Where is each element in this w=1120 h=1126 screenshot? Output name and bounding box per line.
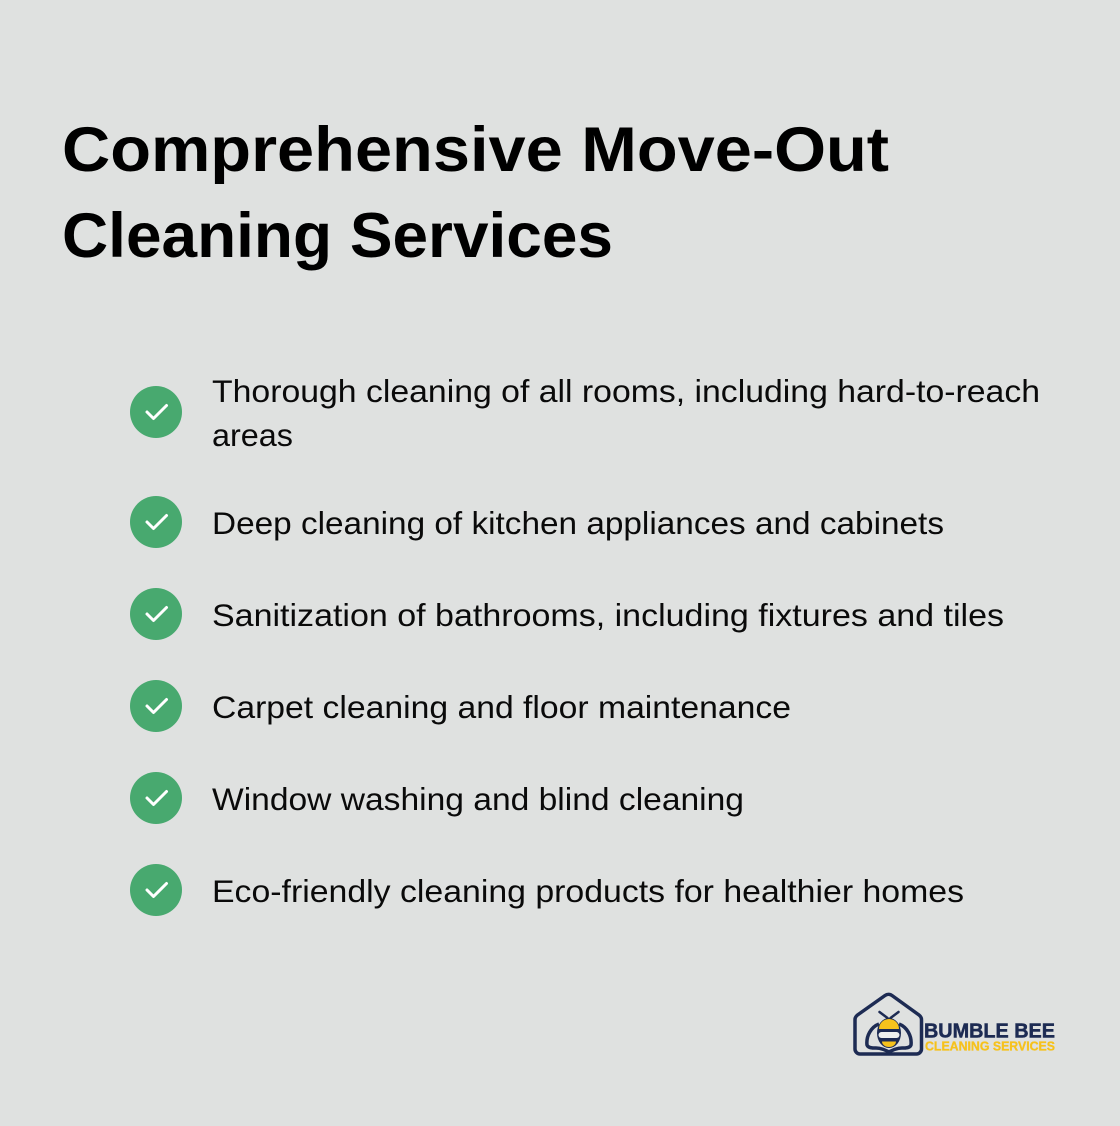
list item: sanitization: Sanitization of bathrooms, including fixtures and tiles (212, 597, 1004, 633)
list item: thorough cleaning (130, 373, 1040, 453)
list item: deep cleaning (130, 496, 944, 548)
icon: house with bee (855, 994, 922, 1054)
list item: deep cleaning: Deep cleaning of kitchen appliances and cabinets (212, 505, 944, 541)
logo wordmark: CLEANING SERVICES (925, 1040, 1055, 1054)
list item: eco-friendly products (130, 864, 964, 916)
list item: thorough cleaning: Thorough cleaning of all rooms, including hard-to-reach (212, 373, 1040, 409)
title (62, 115, 889, 271)
list item: carpet cleaning (130, 680, 791, 732)
list item: window washing: Window washing and blind cleaning (212, 781, 744, 817)
list item: carpet cleaning: Carpet cleaning and floor maintenance (212, 689, 791, 725)
list item: thorough cleaning: areas (212, 417, 293, 453)
logo wordmark (924, 1020, 1055, 1054)
list item: eco-friendly products: Eco-friendly cleaning products for healthier homes (212, 873, 964, 909)
title: Cleaning Services (62, 201, 613, 271)
checklist (130, 373, 1040, 916)
title: Comprehensive Move-Out (62, 115, 889, 185)
logo wordmark: BUMBLE BEE (924, 1020, 1055, 1042)
logo: Bumble Bee Cleaning Services (855, 994, 1055, 1054)
list item: sanitization (130, 588, 1004, 640)
list item: window washing (130, 772, 744, 824)
